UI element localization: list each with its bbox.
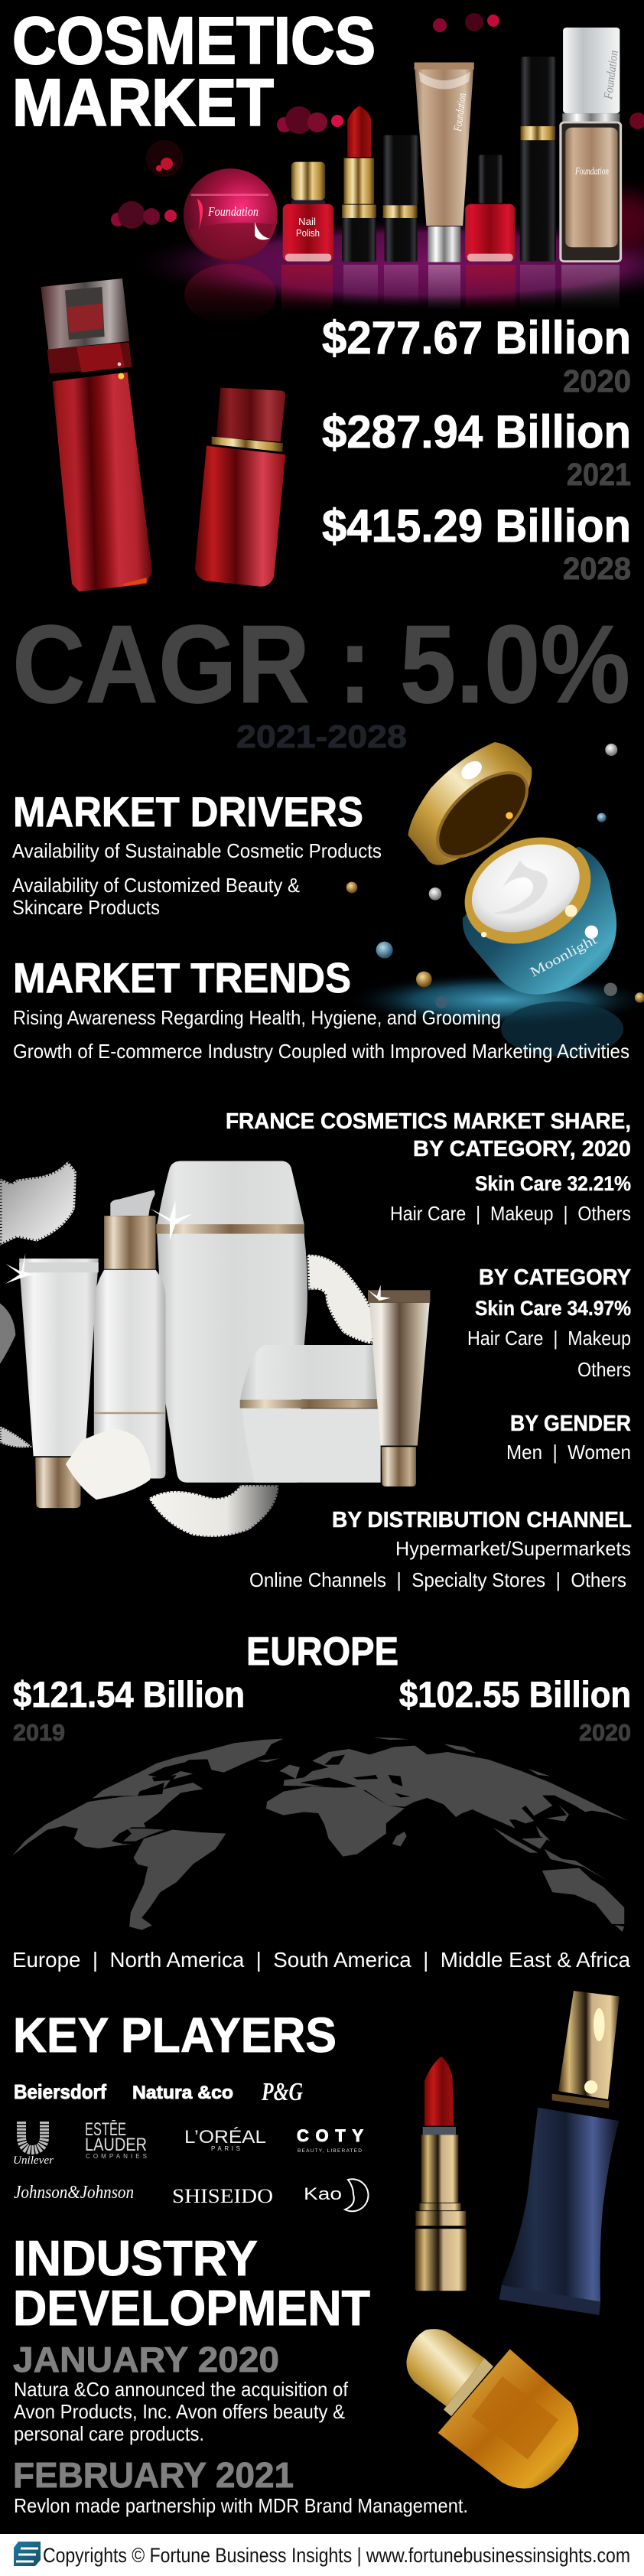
bokeh lights (111, 13, 644, 251)
Europe: 2020 (579, 1719, 631, 1746)
by distribution channel (249, 1508, 632, 1591)
product labels: Nail (298, 216, 316, 227)
footer (0, 2534, 644, 2576)
product labels: Foundation (207, 204, 259, 219)
small tube (368, 1290, 430, 1487)
by category: Skin Care 34.97% (475, 1297, 631, 1320)
cream swirl (492, 861, 548, 914)
by distribution channel: BY DISTRIBUTION CHANNEL (332, 1508, 632, 1532)
Greenland (183, 1739, 284, 1773)
foundation bottle (561, 28, 621, 262)
France market share: BY CATEGORY, 2020 (413, 1137, 631, 1161)
January 2020 (13, 2340, 349, 2445)
title: COSMETICS (12, 4, 376, 78)
by gender: Men | Women (506, 1441, 631, 1464)
company logos: Beiersdorf (14, 2080, 106, 2103)
Europe: $102.55 Billion (399, 1674, 631, 1715)
product labels: Foundation (574, 166, 609, 177)
Europe: EUROPE (246, 1630, 398, 1674)
Kao (304, 2179, 368, 2211)
Unilever: Unilever (13, 2154, 54, 2167)
company logos: P&G (261, 2078, 303, 2106)
L'Oreal: PARIS (211, 2145, 240, 2152)
by gender (506, 1412, 631, 1464)
company logos: Johnson&Johnson (14, 2183, 134, 2203)
nail polish 2 (465, 155, 515, 262)
by distribution channel: Online Channels | Specialty Stores | Others (249, 1568, 626, 1591)
navy tube (499, 1991, 620, 2315)
February 2021: Revlon made partnership with MDR Brand Management. (14, 2494, 468, 2517)
cream (457, 827, 594, 949)
Coty: BEAUTY, LIBERATED (298, 2148, 362, 2154)
compact (184, 168, 278, 262)
January 2020: Avon Products, Inc. Avon offers beauty & (14, 2400, 345, 2423)
market size figures: 2020 (563, 363, 631, 399)
lipstick (342, 106, 376, 262)
Caribbean (123, 1829, 164, 1842)
January 2020: personal care products. (14, 2422, 204, 2445)
feather top left (0, 1161, 76, 1246)
Madagascar (392, 1832, 407, 1846)
France market share (226, 1109, 631, 1225)
L'Oreal: L’ORÉAL (184, 2127, 266, 2148)
regions: Europe | North America | South America | Middle East & Africa (12, 1948, 630, 1972)
product labels: Foundation (452, 93, 469, 132)
reflections (184, 264, 620, 325)
jar label: Moonlight (527, 932, 600, 980)
gold lipstick (415, 2057, 467, 2291)
sparkles (5, 1200, 391, 1301)
illustration: lipstick, navy tube, amber perfume (406, 1991, 620, 2489)
by category (467, 1265, 631, 1381)
industry development heading: DEVELOPMENT (13, 2280, 370, 2336)
feather on tube (66, 1428, 151, 1500)
illustration: cream jar and pearls (344, 742, 644, 1057)
Europe: $121.54 Billion (13, 1674, 245, 1715)
market drivers: Availability of Customized Beauty & (12, 874, 300, 897)
illustration: cosmetics lineup (111, 13, 644, 325)
industry development heading: INDUSTRY (13, 2230, 258, 2286)
Arctic islands (373, 1737, 408, 1740)
January 2020: Natura &Co announced the acquisition of (14, 2378, 349, 2401)
jar reflection (501, 1001, 623, 1057)
Estee Lauder: ESTĒE (85, 2119, 126, 2140)
market size figures: $415.29 Billion (322, 500, 631, 552)
UK and Iceland (279, 1765, 300, 1779)
market size figures (322, 312, 631, 586)
closed lipstick (383, 135, 419, 262)
seas (138, 1754, 411, 1797)
pearls (346, 744, 644, 1008)
jar lid (408, 742, 542, 872)
Europe: 2019 (13, 1719, 65, 1746)
Australia (542, 1868, 624, 1924)
Estee Lauder (85, 2119, 147, 2160)
February 2021: FEBRUARY 2021 (13, 2455, 294, 2495)
floor glow (344, 972, 644, 1027)
Africa (266, 1786, 405, 1857)
market size figures: 2028 (563, 551, 631, 586)
illustration: world map (12, 1737, 629, 1932)
jar body (463, 847, 616, 995)
key players heading: KEY PLAYERS (13, 2008, 337, 2063)
Coty: COTY (297, 2126, 363, 2145)
SE Asia islands (493, 1827, 538, 1853)
amber perfume (406, 2329, 578, 2489)
centre bottle band (156, 1224, 304, 1234)
Eurasia (284, 1746, 629, 1829)
market size figures: $287.94 Billion (322, 406, 631, 458)
market trends (13, 954, 629, 1063)
market drivers: MARKET DRIVERS (13, 788, 363, 835)
February 2021 (13, 2455, 468, 2517)
market trends: MARKET TRENDS (13, 954, 351, 1001)
illustration: white skincare products and feathers (0, 1161, 430, 1537)
Arctic Canada (93, 1750, 205, 1799)
South America (129, 1830, 226, 1930)
CAGR: 2021-2028 (236, 718, 407, 754)
mascara (520, 57, 556, 262)
centre bottle (157, 1161, 307, 1483)
by category: BY CATEGORY (479, 1265, 631, 1290)
market drivers (12, 788, 382, 919)
company logos: SHISEIDO (172, 2185, 273, 2207)
jar (240, 1345, 381, 1483)
product labels (207, 50, 621, 239)
market trends: Rising Awareness Regarding Health, Hygiene, and Grooming (13, 1006, 501, 1029)
market size figures: $277.67 Billion (322, 312, 631, 363)
by gender: BY GENDER (510, 1412, 631, 1436)
France market share: Skin Care 32.21% (475, 1172, 631, 1195)
by category: Others (577, 1358, 631, 1381)
Unilever (13, 2122, 54, 2167)
market drivers: Skincare Products (12, 896, 160, 919)
France market share: FRANCE COSMETICS MARKET SHARE, (226, 1109, 631, 1134)
Estee Lauder: COMPANIES (86, 2153, 147, 2160)
Coty (297, 2126, 363, 2154)
Europe (13, 1630, 631, 1746)
company logos: Natura &co (132, 2083, 233, 2103)
nail polish (283, 162, 333, 262)
Estee Lauder: LAUDER (85, 2135, 147, 2155)
January 2020: JANUARY 2020 (13, 2340, 279, 2379)
title: MARKET (12, 66, 274, 140)
feather left low (0, 1426, 33, 1448)
stage glow (122, 217, 644, 311)
feather right (307, 1255, 377, 1344)
feather left mid (0, 1304, 15, 1364)
feather bottom (148, 1485, 278, 1537)
Kao: Kao (304, 2184, 342, 2203)
gold rim (447, 817, 609, 964)
spray bottle (94, 1190, 165, 1479)
market size figures: 2021 (567, 457, 631, 492)
Japan (546, 1804, 569, 1822)
illustration: red bottles (41, 278, 285, 591)
product labels: Polish (296, 227, 320, 239)
small bottle (195, 388, 285, 587)
beige tube (415, 63, 474, 262)
icon: Fortune Business Insights logo (14, 2542, 41, 2566)
left tube (19, 1259, 99, 1508)
by distribution channel: Hypermarket/Supermarkets (395, 1537, 631, 1560)
product labels: Foundation (602, 50, 621, 100)
market drivers: Availability of Sustainable Cosmetic Products (12, 839, 382, 862)
industry development heading (13, 2230, 370, 2336)
product shapes (184, 28, 621, 262)
North America (12, 1783, 203, 1856)
light flares (481, 905, 598, 939)
large bottle (41, 278, 152, 591)
company logos (13, 2078, 368, 2211)
title (12, 4, 376, 140)
